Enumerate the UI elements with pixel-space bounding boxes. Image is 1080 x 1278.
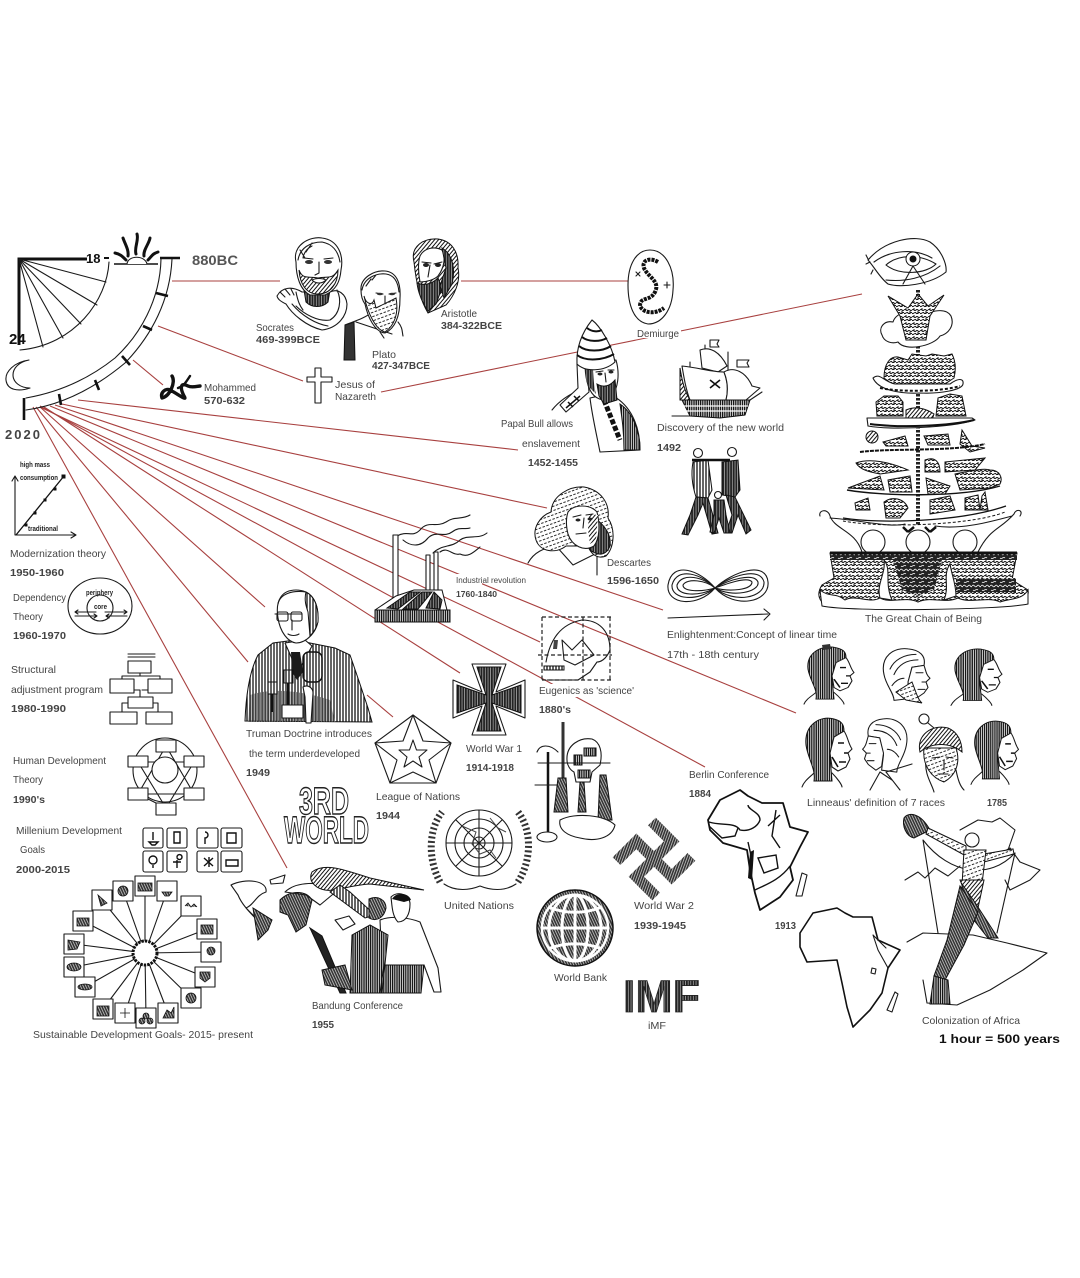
label: iMF: iMF	[648, 1020, 666, 1032]
angel and clouds	[881, 294, 952, 347]
label: Structural adjustment program: Structural	[11, 664, 56, 676]
label: The Great Chain of Being: The Great Chain of Being	[865, 613, 982, 625]
label: Structural adjustment program: adjustment program	[11, 684, 103, 696]
icon: Structural adjustment org chart	[110, 654, 172, 724]
legend: time scale: 1 hour = 500 years	[939, 1032, 1060, 1046]
icon: Aristotle bust	[413, 239, 459, 313]
label: Discovery of the new world	[657, 422, 784, 454]
icon: factory	[375, 515, 487, 622]
tier: humans	[867, 394, 975, 428]
icon: Colossus colonization figure	[903, 814, 1047, 1005]
label: Socrates	[256, 322, 320, 346]
icon: ship	[672, 340, 762, 418]
label: Enlightenment: 17th - 18th century	[667, 649, 760, 661]
label: Modernization theory: Modernization theory	[10, 548, 107, 560]
icon: Socrates bust	[277, 238, 347, 330]
label: Eugenics: 1880's	[539, 704, 571, 716]
label: Human Development Theory: Human Development	[13, 755, 106, 767]
label: Jesus of Nazareth	[335, 379, 376, 403]
label: Human Development Theory: Theory	[13, 774, 44, 786]
great chain	[916, 290, 920, 525]
label: Dependency Theory: Dependency	[13, 592, 67, 604]
label: Demiurge: Demiurge	[637, 328, 679, 340]
label: 1913: 1913	[775, 920, 796, 932]
tier: scrollwork and elements	[820, 510, 1021, 554]
label: Berlin Conference: Berlin Conference	[689, 769, 769, 781]
label: Human Development Theory	[13, 755, 106, 806]
icon: cross	[307, 368, 332, 403]
icon: Millennium Development Goals squares	[143, 828, 242, 872]
icon: 3RD WORLD lettering: 3RD	[299, 781, 349, 823]
label: World War 2	[634, 900, 694, 932]
label: League of Nations: League of Nations	[376, 791, 460, 803]
icon: 3RD WORLD lettering	[284, 781, 369, 852]
icon: eugenics skull diagram	[538, 617, 612, 680]
label: Berlin Conference: 1884	[689, 788, 711, 800]
portrait row two	[802, 714, 1018, 792]
icon: Dependency core periphery diagram: periphery	[86, 588, 114, 597]
label: Aristotle	[441, 308, 502, 332]
icon: sun	[114, 234, 158, 264]
icon: iron cross	[453, 664, 525, 735]
land behind colossus	[905, 848, 1047, 1005]
label: World Bank: World Bank	[554, 972, 608, 984]
icon: Modernization theory chart: traditional	[28, 524, 58, 533]
portrait row one	[804, 644, 1002, 705]
label: 1785: 1785	[987, 797, 1007, 809]
label: Socrates: Socrates	[256, 322, 294, 334]
label: Bandung Conference: 1955	[312, 1019, 334, 1031]
icon: League of Nations pentagon star	[375, 715, 451, 783]
clock: 24-hour quarter dial	[9, 251, 109, 350]
label: United Nations: United Nations	[444, 900, 514, 912]
clock: 24-hour quarter dial: 24	[9, 331, 26, 348]
icon: Human Development network	[128, 738, 204, 815]
icon: Truman at microphones	[245, 590, 372, 723]
label: Truman Doctrine: 1949	[246, 767, 270, 779]
icon: crescent moon	[6, 360, 30, 390]
label: Linnaeus: Linneaus' definition of 7 races	[807, 797, 945, 809]
label: World War 2: World War 2	[634, 900, 694, 912]
label: Millennium Development Goals: Goals	[20, 844, 45, 856]
label: Descartes: Descartes	[607, 557, 651, 569]
label: 880BC: 880BC	[192, 252, 238, 268]
label: Mohammed: Mohammed	[204, 382, 256, 394]
icon: infinity loops with arrow	[668, 570, 770, 620]
label: Plato	[372, 349, 430, 372]
label: Industrial revolution	[455, 574, 526, 599]
icon: Modernization theory chart	[12, 460, 76, 538]
icon: Africa 1913 map	[708, 790, 808, 910]
label: Aristotle: Aristotle	[441, 308, 477, 320]
label: Truman Doctrine: Truman Doctrine introduces	[246, 728, 372, 740]
icon: 3RD WORLD lettering: WORLD	[284, 810, 369, 852]
label: Berlin Conference	[689, 769, 769, 800]
label: Enlightenment	[667, 629, 837, 661]
tier: beasts	[847, 469, 1001, 495]
label: Discovery of the new world: 1492	[657, 442, 681, 454]
label: Colonization of Africa: Colonization of Africa	[922, 1015, 1020, 1027]
icon: Dependency core periphery diagram	[68, 578, 132, 634]
label: Industrial revolution: 1760-1840	[456, 590, 498, 599]
label: Millennium Development Goals	[16, 825, 122, 876]
label: Eugenics	[537, 684, 637, 716]
icon: Linnaeus seven race portraits	[802, 644, 1018, 792]
label: Aristotle: 384-322BCE	[441, 320, 502, 332]
goal boxes	[64, 876, 221, 1028]
label: Dependency Theory: 1960-1970	[13, 630, 66, 642]
label: League of Nations	[376, 791, 460, 822]
goal glyphs	[67, 883, 215, 1024]
label: Human Development Theory: 1990's	[13, 794, 45, 806]
label: Truman Doctrine: the term underdeveloped	[249, 748, 360, 760]
label: Dependency Theory: Theory	[13, 611, 44, 623]
icon: Demiurge seal	[628, 250, 673, 324]
label: Jesus of Nazareth: Jesus of	[335, 379, 375, 391]
label: 2020: 2020	[5, 427, 40, 442]
label: Structural adjustment program	[11, 664, 103, 715]
label: Dependency Theory	[13, 592, 67, 642]
label: Modernization theory: 1950-1960	[10, 567, 64, 579]
label: Socrates: 469-399BCE	[256, 334, 320, 346]
eye of god	[866, 239, 946, 286]
tier: birds and reptiles	[856, 458, 985, 474]
icon: Sustainable Development Goals wheel	[64, 876, 221, 1028]
label: Truman Doctrine	[246, 728, 372, 779]
tier: angels	[873, 354, 963, 393]
clock: 24-hour quarter dial: 18	[86, 251, 100, 266]
label: Discovery of the new world: Discovery of the new world	[657, 422, 784, 434]
icon: United Nations emblem	[431, 810, 528, 890]
tier: animals	[860, 430, 985, 452]
icon: Africa outline map	[800, 908, 900, 1027]
label: Papal Bull: 1452-1455	[528, 457, 578, 469]
icon: Modernization theory chart: high mass	[20, 460, 50, 469]
label: Plato: 427-347BCE	[372, 360, 430, 372]
tier: plants	[843, 492, 1006, 525]
icon: Descartes portrait	[528, 487, 613, 575]
icon: Dependency core periphery diagram: core	[94, 602, 107, 611]
icon: swastika, World War 2 symbol	[614, 819, 694, 899]
timeline band	[24, 258, 180, 420]
label: Bandung Conference	[312, 1000, 403, 1031]
icon: Bandung torch figures	[310, 867, 441, 993]
label: Plato: Plato	[372, 349, 396, 361]
icon: Plato bust	[344, 271, 403, 360]
icon: Modernization theory chart: consumption	[20, 473, 58, 482]
label: Sustainable Development Goals: Sustainable Development Goals- 2015- present	[33, 1029, 253, 1041]
label: Millennium Development Goals: Millenium Development	[16, 825, 122, 837]
icon: Bandung world map	[231, 875, 355, 940]
label: Millennium Development Goals: 2000-2015	[16, 864, 70, 876]
label: Papal Bull: Papal Bull allows	[501, 418, 573, 430]
label: Jesus of Nazareth: Nazareth	[335, 391, 376, 403]
label: World War 2: 1939-1945	[634, 920, 686, 932]
icon: World Bank globe	[537, 890, 613, 966]
label: Mohammed: 570-632	[204, 395, 245, 407]
label: Papal Bull	[501, 418, 580, 469]
label: Papal Bull: enslavement	[522, 438, 580, 450]
label: Mohammed	[204, 382, 256, 407]
label: World War 1	[466, 743, 522, 774]
label: World War 1: World War 1	[466, 743, 522, 755]
label: Industrial revolution: Industrial revolution	[456, 576, 526, 585]
icon: IMF lettering: IMF	[623, 971, 700, 1022]
label: Descartes	[607, 557, 659, 587]
label: World War 1: 1914-1918	[466, 762, 514, 774]
label: Descartes: 1596-1650	[607, 575, 659, 587]
label: League of Nations: 1944	[376, 810, 400, 822]
icon: calipers and skull	[535, 722, 615, 842]
icon: Mohammed calligraphy	[162, 376, 200, 398]
icon: Great Chain of Being	[819, 239, 1028, 610]
label: Structural adjustment program: 1980-1990	[11, 703, 66, 715]
label: Eugenics: Eugenics as 'science'	[539, 685, 634, 697]
icon: enslaved figures in yoke	[682, 448, 751, 535]
label: Bandung Conference: Bandung Conference	[312, 1000, 403, 1012]
tier: underworld	[819, 553, 1028, 610]
red connector lines	[33, 281, 862, 868]
label: Enlightenment: Enlightenment:Concept of linear time	[667, 629, 837, 641]
label: Modernization theory	[10, 548, 107, 579]
icon: Pope	[552, 320, 640, 452]
